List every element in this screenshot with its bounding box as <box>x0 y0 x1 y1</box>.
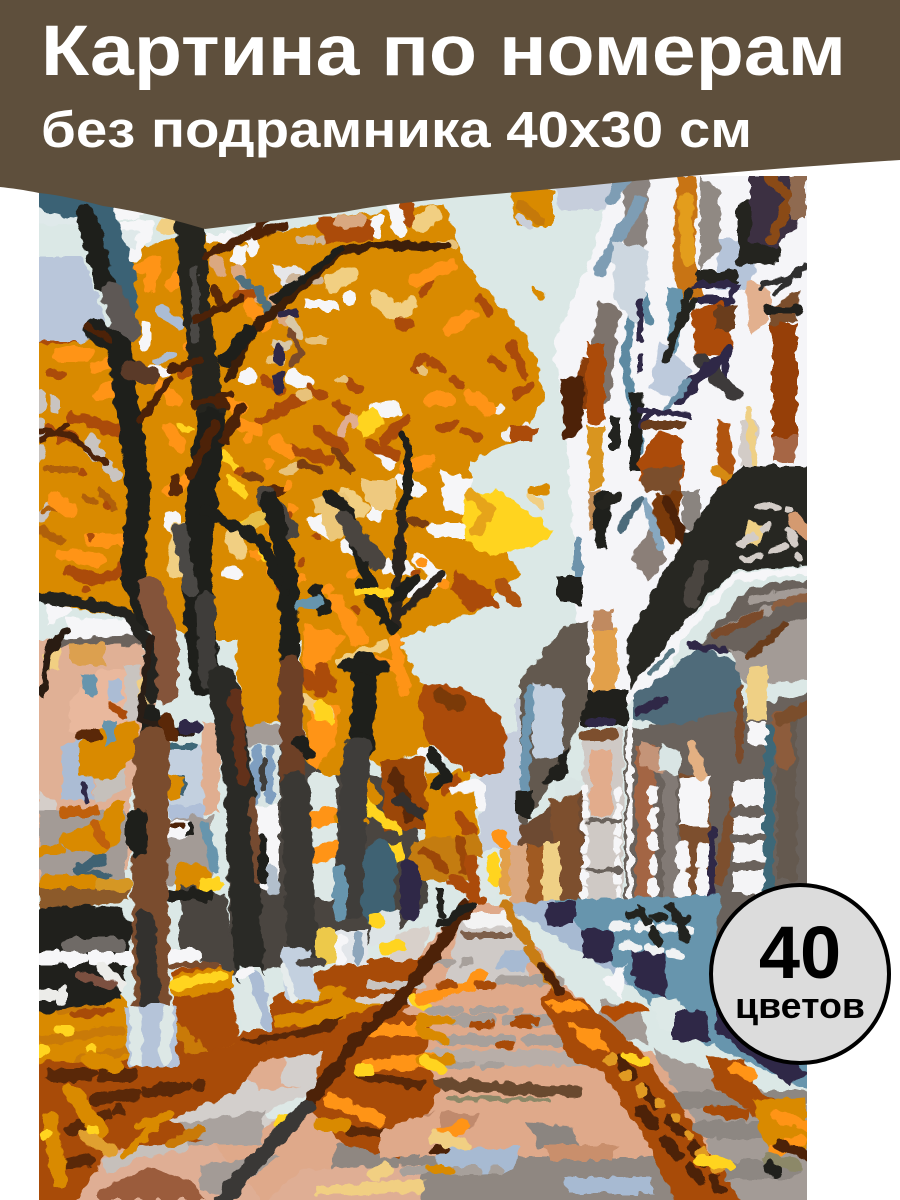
ground: pavement <box>20 905 820 1200</box>
fallen leaves: left and centre <box>20 955 550 1200</box>
tree bases painted white <box>126 910 430 1067</box>
dark backdrop behind the trees <box>225 700 430 975</box>
foliage: rust and bright dabs <box>40 200 510 610</box>
badge: 40 colours: цветов <box>735 985 865 1026</box>
sapling line across pavement <box>215 905 470 1200</box>
fallen leaves: right gutter <box>505 905 807 1200</box>
title: Картина по номерам <box>41 12 846 91</box>
building: upper facade <box>553 170 820 700</box>
tree trunks and branches <box>39 200 445 1005</box>
foliage: white gaps and cream dabs <box>40 196 540 590</box>
foliage: right fringe and floating leaves <box>450 205 553 610</box>
left background building <box>30 598 336 1015</box>
subtitle: без подрамника 40х30 см <box>41 101 752 158</box>
foliage: lower central tree <box>300 600 510 900</box>
painting: autumn street <box>20 160 820 1200</box>
foliage: main crown <box>30 189 553 725</box>
building: lower storefronts <box>508 574 807 938</box>
badge: 40 colours <box>711 885 889 1063</box>
header banner <box>0 0 900 229</box>
pale clouds <box>30 183 620 850</box>
sky <box>39 189 807 1105</box>
badge: 40 colours: 40 <box>759 911 841 994</box>
building: dark balcony <box>625 466 815 737</box>
building: base and steps <box>505 895 820 1095</box>
